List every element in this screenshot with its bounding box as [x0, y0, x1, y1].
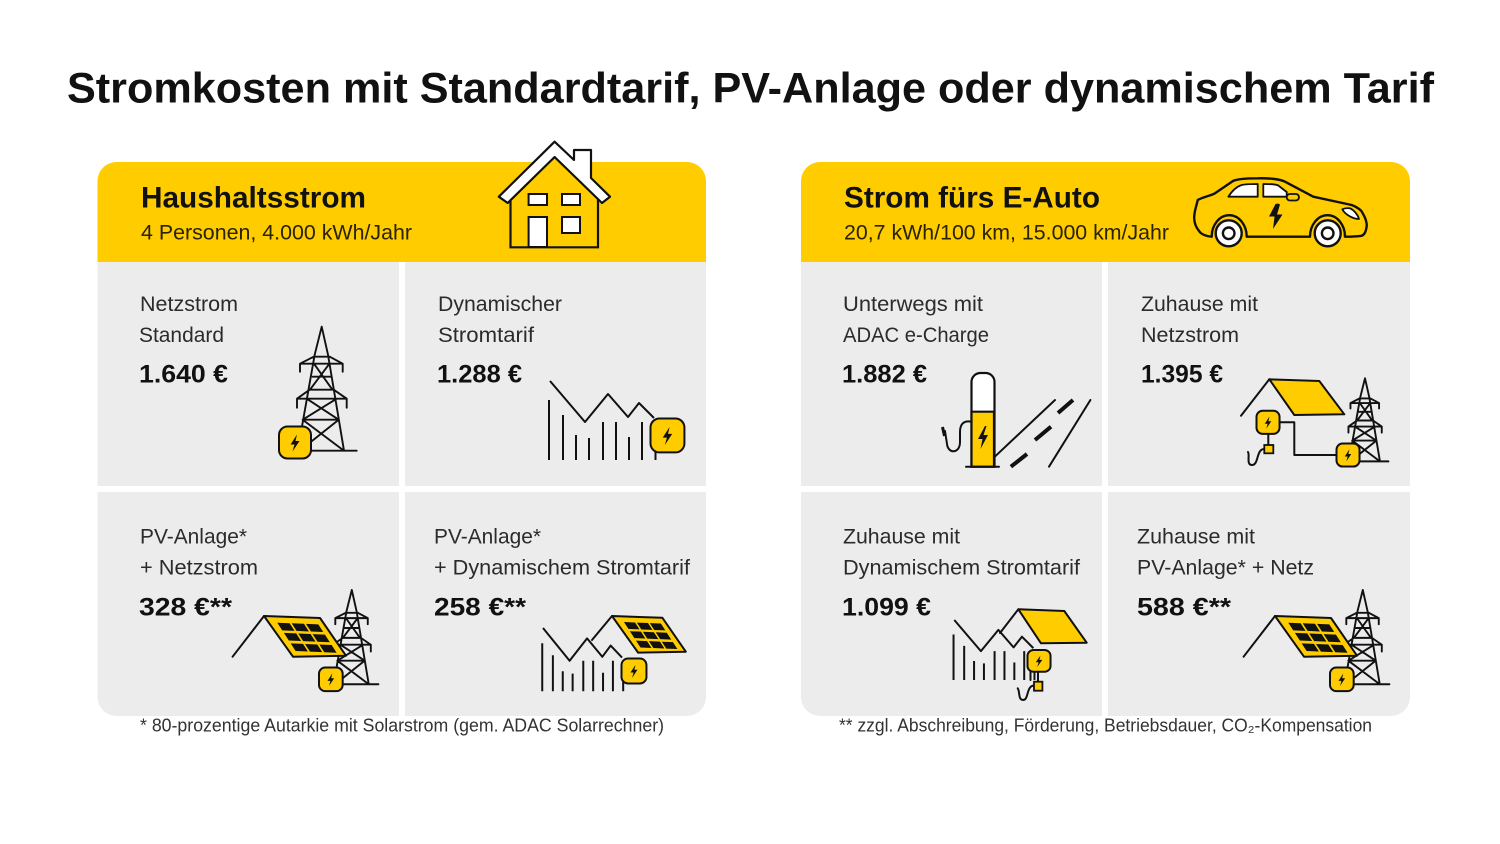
- icon: solar roof with pylon: [1244, 590, 1389, 691]
- cell: PV-Anlage + Dynamischem Stromtarif: + Dynamischem Stromtarif: [434, 556, 690, 580]
- icon: charging station and road: [942, 373, 1090, 467]
- header band: Haushaltsstrom: [98, 162, 706, 262]
- cell: Unterwegs mit ADAC e-Charge: ADAC e-Charge: [843, 324, 989, 347]
- cell: Dynamischer Stromtarif: [405, 262, 706, 486]
- icon: pylon with meter: [279, 327, 357, 458]
- subheading: car consumption: 20,7 kWh/100 km, 15.000 km/Jahr: [844, 222, 1169, 244]
- cell: Dynamischer Stromtarif: 1.288 €: [437, 360, 522, 388]
- cell: Unterwegs mit ADAC e-Charge: Unterwegs mit: [843, 293, 983, 316]
- header band: E-Auto: [801, 162, 1410, 262]
- cell: Dynamischer Stromtarif: Dynamischer: [438, 293, 562, 316]
- title: Stromkosten mit Standardtarif, PV-Anlage oder dynamischem Tarif: [67, 64, 1435, 112]
- cell: Netzstrom Standard: Netzstrom: [140, 293, 238, 316]
- cell: PV-Anlage + Dynamischem Stromtarif: 258 €**: [434, 594, 526, 622]
- cell: Zuhause mit PV-Anlage + Netz: PV-Anlage* + Netz: [1137, 556, 1314, 580]
- cell: Zuhause mit Dynamischem Stromtarif: [801, 492, 1102, 716]
- cell: PV-Anlage + Dynamischem Stromtarif: PV-Anlage*: [434, 526, 541, 548]
- icon: car: [1194, 178, 1367, 246]
- icon: solar roof with pylon: [233, 590, 378, 691]
- subheading: household: 4 Personen, 4.000 kWh/Jahr: [141, 222, 412, 244]
- panel: Strom fürs E-Auto: [801, 162, 1410, 716]
- footnote: Abschreibung: ** zzgl. Abschreibung, Förderung, Betriebsdauer, CO₂-Kompensation: [839, 716, 1372, 736]
- icon: solar roof with price chart: [542, 616, 686, 691]
- cell: Netzstrom Standard: Standard: [139, 324, 224, 347]
- icon: roof, price chart and wallbox: [954, 609, 1087, 700]
- cell: Zuhause mit Netzstrom: Zuhause mit: [1141, 293, 1258, 316]
- icon: price chart with meter: [549, 381, 684, 460]
- icon: house with meters and pylon: [1241, 378, 1388, 467]
- cell: Dynamischer Stromtarif: Stromtarif: [438, 324, 534, 347]
- cell: PV-Anlage + Netzstrom: + Netzstrom: [140, 556, 258, 580]
- cell: PV-Anlage + Netzstrom: [98, 492, 399, 716]
- cell: PV-Anlage + Dynamischem Stromtarif: [405, 492, 706, 716]
- heading: Strom fürs E-Auto: Strom fürs E-Auto: [844, 182, 1100, 214]
- heading: Haushaltsstrom: Haushaltsstrom: [141, 182, 366, 214]
- cell: Zuhause mit Netzstrom: Netzstrom: [1141, 324, 1239, 347]
- panel: Haushaltsstrom: [98, 142, 706, 716]
- cell: Zuhause mit PV-Anlage + Netz: [1108, 492, 1410, 716]
- cell: Unterwegs mit ADAC e-Charge: [801, 262, 1102, 486]
- cell: Zuhause mit PV-Anlage + Netz: Zuhause mit: [1137, 526, 1255, 548]
- cell: Zuhause mit Netzstrom: [1108, 262, 1410, 486]
- cell: Netzstrom Standard: 1.640 €: [139, 360, 228, 388]
- footnote: Autarkie: * 80-prozentige Autarkie mit Solarstrom (gem. ADAC Solarrechner): [140, 716, 664, 736]
- cell: Zuhause mit Dynamischem Stromtarif: Zuhause mit: [843, 526, 960, 548]
- cell: Zuhause mit Dynamischem Stromtarif: Dynamischem Stromtarif: [843, 556, 1080, 580]
- icon: house: [499, 142, 610, 247]
- cell: Zuhause mit Dynamischem Stromtarif: 1.099 €: [842, 594, 931, 622]
- cell: Zuhause mit PV-Anlage + Netz: 588 €**: [1137, 594, 1231, 622]
- cell: Netzstrom Standard: [98, 262, 399, 486]
- cell: PV-Anlage + Netzstrom: PV-Anlage*: [140, 526, 247, 548]
- cell: PV-Anlage + Netzstrom: 328 €**: [139, 594, 232, 622]
- cell: Zuhause mit Netzstrom: 1.395 €: [1141, 360, 1223, 388]
- cell: Unterwegs mit ADAC e-Charge: 1.882 €: [842, 360, 927, 388]
